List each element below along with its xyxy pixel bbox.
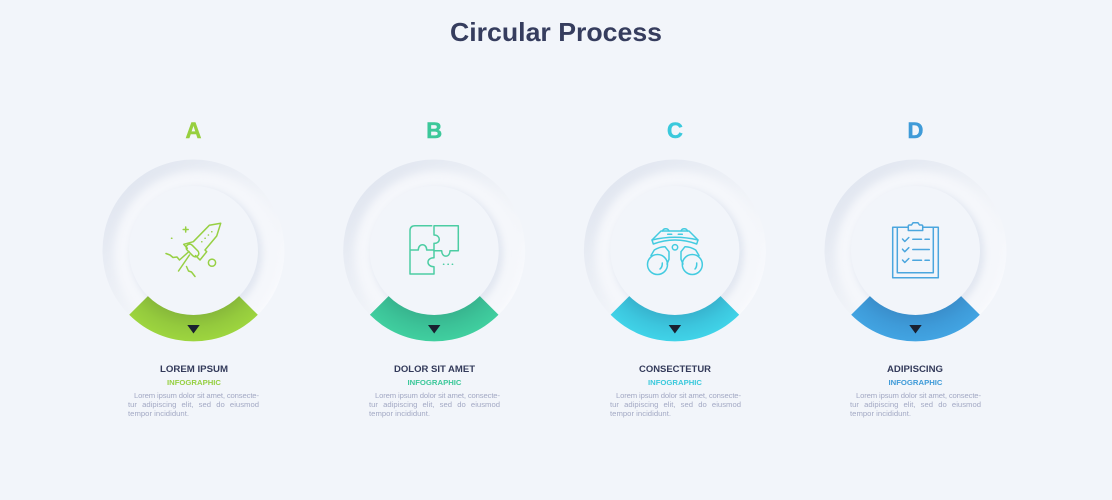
label C: tur adipiscing elit, sed do eiusmod <box>610 400 741 409</box>
arrow A <box>187 325 200 334</box>
icon: clipboard <box>893 223 938 278</box>
panel: step D <box>824 122 984 418</box>
ring C <box>584 160 743 342</box>
highlighted segment B <box>370 296 498 341</box>
letter D: D <box>908 118 923 143</box>
highlighted segment D <box>851 296 980 341</box>
arrow D <box>909 325 922 334</box>
ring D <box>824 160 984 342</box>
label A: Lorem ipsum dolor sit amet, consecte- <box>134 391 259 400</box>
label C: Lorem ipsum dolor sit amet, consecte- <box>616 391 741 400</box>
icon: binoculars <box>648 229 702 274</box>
label D: Lorem ipsum dolor sit amet, consecte- <box>856 391 981 400</box>
panel: step A <box>102 122 262 418</box>
label C: INFOGRAPHIC <box>648 378 703 387</box>
label C <box>610 364 741 418</box>
ring A <box>102 160 262 342</box>
label B: tur adipiscing elit, sed do eiusmod <box>369 400 500 409</box>
label A: LOREM IPSUM <box>160 364 228 375</box>
icon: rocket <box>166 223 221 276</box>
ring B <box>344 160 502 342</box>
label D: ADIPISCING <box>887 364 943 375</box>
arrow C <box>669 325 681 334</box>
label D <box>850 364 981 418</box>
label D: tempor incididunt. <box>850 409 911 418</box>
label A: tempor incididunt. <box>128 409 189 418</box>
label B: DOLOR SIT AMET <box>394 364 475 375</box>
letter B: B <box>426 118 442 143</box>
label A <box>128 364 259 418</box>
icon: puzzle <box>410 226 458 274</box>
panel: step C <box>584 122 743 418</box>
label D: tur adipiscing elit, sed do eiusmod <box>850 400 981 409</box>
arrow B <box>428 325 440 334</box>
label B <box>369 364 500 418</box>
label B: Lorem ipsum dolor sit amet, consecte- <box>375 391 500 400</box>
label A: tur adipiscing elit, sed do eiusmod <box>128 400 259 409</box>
label C: tempor incididunt. <box>610 409 671 418</box>
highlighted segment A <box>129 296 258 341</box>
label C: CONSECTETUR <box>639 364 711 375</box>
label B: tempor incididunt. <box>369 409 430 418</box>
title: Circular Process <box>450 17 662 47</box>
label D: INFOGRAPHIC <box>888 378 943 387</box>
panel: step B <box>344 122 502 418</box>
letter A: A <box>186 118 202 143</box>
label A: INFOGRAPHIC <box>167 378 222 387</box>
highlighted segment C <box>611 296 739 341</box>
label B: INFOGRAPHIC <box>408 378 462 387</box>
letter C: C <box>667 118 683 143</box>
